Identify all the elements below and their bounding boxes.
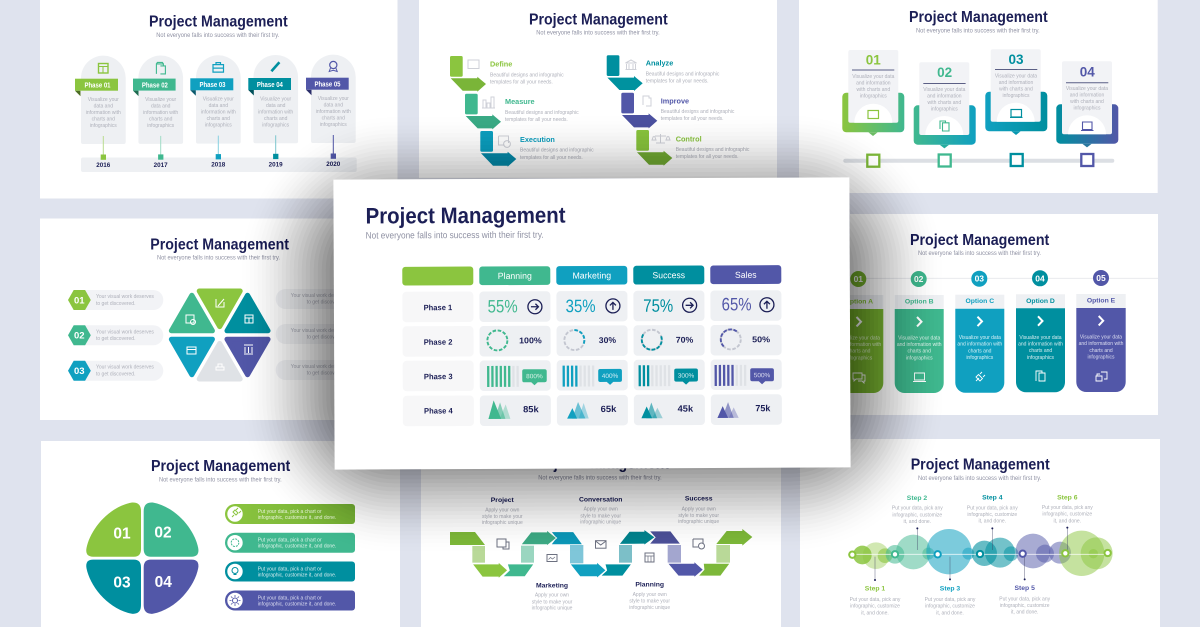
phase 03: charts and [207, 116, 230, 122]
step 2: infographic, customize [892, 512, 942, 518]
option C: infographics [966, 355, 994, 361]
phase 04: charts and [264, 116, 288, 122]
title: Project Management [911, 456, 1050, 473]
row 2: progress rings: 50% [752, 334, 771, 344]
item 01 [68, 290, 163, 310]
step 6: it, and done. [1054, 518, 1081, 524]
row 4: mountains and values [480, 394, 782, 426]
step: improve: Beautiful designs and infographic [661, 109, 735, 115]
card 03: and information [999, 80, 1033, 86]
card 02: infographics [931, 106, 958, 112]
option A: charts and [847, 349, 871, 355]
phase 01 [75, 56, 126, 169]
phase 05: charts and [322, 116, 345, 122]
step 1 [850, 586, 901, 616]
step: analyze [607, 55, 720, 91]
phase 02: data and [151, 103, 171, 109]
phase 03: data and [209, 103, 228, 109]
option A [834, 271, 883, 393]
right pills: to get discovered. [307, 370, 346, 376]
card 04: and information [1070, 92, 1104, 98]
option A: and information with [836, 342, 881, 348]
step: measure: templates for all your needs. [505, 117, 568, 123]
step: execution [480, 131, 594, 167]
step 1: it, and done. [861, 610, 889, 616]
phase 05: Visualize your [318, 96, 349, 102]
phase 04: Visualize your [260, 96, 292, 102]
phase 03: 2018 [211, 162, 226, 169]
row 2: progress rings [480, 325, 782, 356]
row labels: Phase 1 [424, 303, 453, 312]
option C: Visualize your data [959, 335, 1001, 341]
step 4: Step 4 [982, 495, 1003, 502]
label: marketing: Apply your own [535, 593, 569, 599]
center card shadow [237, 111, 947, 556]
title: Project Management [150, 236, 289, 253]
label: conversation: Apply your own [584, 507, 618, 513]
connector line [850, 277, 1158, 279]
phase 02: Visualize your [145, 97, 177, 103]
card 03: 03 [1008, 52, 1024, 67]
row 4: mountains and values: 75k [755, 403, 771, 413]
slide: phases timeline [40, 0, 398, 198]
option B: and information with [897, 342, 942, 348]
option D: infographics [1027, 355, 1054, 361]
slide: quadrant circle [41, 441, 400, 627]
header row: Marketing [572, 270, 611, 281]
option D: and information with [1018, 342, 1063, 348]
card 02: Visualize your data [923, 87, 966, 93]
row 3: bars and callouts: 300% [678, 373, 695, 380]
slide: options columns [834, 214, 1158, 415]
step 6: Put your data, pick any [1042, 505, 1093, 511]
step: execution: templates for all your needs. [520, 155, 583, 161]
slide: numbered cards [799, 0, 1158, 193]
subtitle: Not everyone falls into success with their first try. [918, 475, 1041, 482]
step: improve: Improve [661, 96, 689, 105]
main subtitle: Not everyone falls into success with their first try. [366, 230, 544, 240]
subtitle: Not everyone falls into success with their first try. [156, 32, 279, 39]
right pills: to get discovered. [307, 300, 346, 306]
step: define: Beautiful designs and infographic [490, 72, 564, 78]
quadrant 01 [86, 502, 141, 557]
label: conversation: infographic unique [580, 519, 621, 525]
item 03: Your visual work deserves [96, 364, 154, 370]
subtitle: Not everyone falls into success with their first try. [538, 475, 662, 482]
option A: infographics [845, 355, 873, 361]
bubble chart [849, 527, 1113, 581]
subtitle: Not everyone falls into success with their first try. [918, 250, 1041, 257]
phase 04: infographics [262, 122, 290, 128]
phase 04: information with [258, 109, 293, 115]
option C: 03 [975, 274, 984, 284]
phase 05: Phase 05 [314, 82, 341, 88]
step: analyze: templates for all your needs. [646, 79, 709, 85]
card 01: infographics [860, 94, 887, 100]
phase 05: information with [316, 109, 351, 115]
card 03: Visualize your data [995, 74, 1037, 80]
step: define: Define [490, 59, 512, 68]
row 4: mountains and values: 45k [678, 404, 694, 414]
item 03: 03 [74, 366, 85, 377]
card 03: with charts and [999, 86, 1033, 92]
step: control: Control [676, 134, 702, 143]
phase 01: data and [94, 104, 113, 110]
card 03 [985, 49, 1047, 166]
subtitle: Not everyone falls into success with their first try. [157, 254, 280, 261]
step 6: infographic, customize [1042, 512, 1092, 518]
phase 01: charts and [92, 116, 115, 122]
item 02 [68, 325, 163, 345]
step 2: Step 2 [907, 495, 927, 502]
step 5: Put your data, pick any [999, 596, 1051, 602]
card 04: Visualize your data [1066, 86, 1108, 92]
step 4: it, and done. [979, 519, 1006, 525]
quadrant 04 [144, 560, 198, 614]
row 2: progress rings: 100% [519, 335, 542, 345]
step 6: Step 6 [1057, 494, 1078, 501]
title: Project Management [529, 11, 668, 28]
subtitle: Not everyone falls into success with their first try. [159, 477, 282, 484]
phase 02: Phase 02 [142, 82, 168, 89]
phase 01: information with [86, 110, 121, 116]
quadrant 02 [144, 502, 198, 557]
right pills: Your visual work deserves [291, 293, 349, 299]
card 03: infographics [1003, 93, 1030, 99]
step 3: infographic, customize [925, 604, 975, 610]
title: Project Management [909, 9, 1048, 26]
bar 2: infographic, customize it, and done. [258, 544, 336, 550]
row 3: bars and callouts [480, 359, 782, 391]
right pills: Your visual work deserves [291, 328, 349, 334]
item 02: 02 [74, 331, 85, 342]
phase 01: Visualize your [88, 97, 119, 103]
step: measure: Beautiful designs and infographic [505, 110, 579, 116]
row 1: percentages [479, 290, 781, 322]
label: marketing: style to make your [532, 599, 573, 605]
item 02: to get discovered. [96, 336, 135, 342]
row 3: bars and callouts: 800% [526, 373, 543, 380]
step 3: Step 3 [940, 586, 960, 593]
phase 04: 2019 [269, 161, 283, 168]
phase 05: infographics [320, 122, 347, 128]
step: control: Beautiful designs and infographic [676, 147, 750, 153]
card 01: with charts and [856, 87, 890, 93]
bar 2: Put your data, pick a chart or [258, 538, 322, 544]
phase 05 [306, 55, 356, 168]
phase 04: data and [266, 103, 286, 109]
label: planning: Apply your own [633, 592, 667, 598]
row 1: percentages: 55% [488, 296, 518, 316]
option D: Option D [1026, 298, 1055, 305]
step: analyze: Beautiful designs and infographic [646, 72, 720, 78]
option C [955, 271, 1004, 393]
row 1: percentages: 35% [566, 296, 596, 316]
step 5 [999, 585, 1051, 616]
option E: Visualize your data [1080, 334, 1122, 340]
item 03: to get discovered. [96, 371, 135, 377]
triangle hexagon [171, 291, 268, 379]
step 1: Put your data, pick any [850, 597, 901, 603]
label: success: Success [685, 496, 713, 503]
phase 03: infographics [205, 123, 232, 129]
card 04 [1056, 61, 1118, 166]
label: success: infographic unique [678, 519, 719, 525]
option B [895, 271, 944, 393]
step: measure: Measure [505, 97, 535, 106]
quadrant 01: 01 [113, 525, 131, 542]
label: planning: infographic unique [629, 605, 670, 611]
bar 4: infographic, customize it, and done. [258, 602, 336, 608]
phase 03: information with [201, 110, 236, 116]
card 01: 01 [866, 52, 881, 67]
step 3: Put your data, pick any [925, 597, 976, 603]
phase 03: Visualize your [203, 97, 234, 103]
step 5: Step 5 [1014, 585, 1035, 592]
row 1: percentages: 65% [722, 294, 752, 314]
step: control [636, 130, 750, 166]
title: Project Management [151, 458, 290, 475]
bar 1: Put your data, pick a chart or [258, 509, 322, 515]
option B: charts and [908, 349, 931, 355]
card 02 [914, 62, 976, 166]
option C: Option C [965, 298, 994, 305]
option C: charts and [968, 348, 992, 354]
row 2: progress rings: 30% [599, 335, 617, 345]
step: analyze: Analyze [646, 59, 673, 68]
label: conversation: Conversation [579, 496, 622, 503]
row 4: mountains and values: 85k [523, 404, 540, 414]
label: project: style to make your [482, 514, 523, 520]
option A: Option A [845, 298, 873, 306]
option A: Visualize your data [838, 335, 880, 341]
right pills: Your visual work deserves [291, 364, 349, 370]
label: project [482, 497, 523, 549]
option A: 01 [854, 274, 863, 284]
row 3: bars and callouts: 500% [754, 372, 771, 379]
title: Project Management [910, 232, 1049, 249]
header row: Planning [498, 271, 532, 281]
option B: 02 [914, 274, 924, 284]
step: measure [465, 94, 579, 129]
step 2 [892, 495, 943, 525]
slide: define measure execution steps [419, 0, 777, 178]
phase 01: 2016 [96, 162, 111, 169]
item 03 [68, 361, 163, 381]
item 01: to get discovered. [96, 301, 135, 307]
quadrant 02: 02 [154, 524, 172, 541]
row 2: progress rings: 70% [676, 335, 694, 345]
phase 02: charts and [149, 116, 173, 122]
option B: Option B [905, 298, 934, 305]
title: Project Management [149, 14, 288, 31]
option E [1076, 270, 1126, 392]
panel: center project management table [333, 177, 851, 470]
main title: Project Management [365, 203, 566, 228]
bar 1 [225, 504, 355, 524]
item 01: Your visual work deserves [96, 294, 154, 300]
item 01: 01 [74, 295, 85, 306]
step: control: templates for all your needs. [676, 154, 739, 160]
label: marketing: Marketing [536, 582, 568, 589]
option D: Visualize your data [1019, 335, 1062, 341]
label: conversation: style to make your [580, 513, 621, 519]
slide: hexagon triangles [40, 218, 356, 420]
row labels: Phase 4 [424, 406, 453, 416]
phase 02: information with [143, 110, 178, 116]
phase 05: data and [324, 102, 343, 108]
bar 3 [225, 562, 355, 582]
bar 3: infographic, customize it, and done. [258, 572, 336, 578]
option D: charts and [1029, 348, 1052, 354]
title: Project Management [530, 456, 669, 472]
step: execution: Beautiful designs and infographic [520, 148, 594, 154]
card 02: and information [927, 94, 962, 100]
label: planning: style to make your [629, 599, 670, 605]
bar 1: infographic, customize it, and done. [258, 515, 336, 521]
card 04: with charts and [1070, 99, 1104, 105]
label: success: Apply your own [682, 506, 716, 512]
step: improve [621, 93, 735, 128]
option D: 04 [1035, 273, 1045, 283]
label: marketing [532, 554, 573, 611]
step 2: it, and done. [904, 519, 931, 525]
quadrant 03: 03 [113, 574, 131, 591]
header row: Sales [735, 270, 757, 280]
step 5: infographic, customize [1000, 603, 1050, 609]
label: project: infographic unique [482, 520, 523, 526]
phase 01: Phase 01 [84, 82, 111, 90]
step 5: it, and done. [1011, 610, 1038, 616]
bar 4: Put your data, pick a chart or [258, 596, 322, 602]
option B: Visualize your data [898, 335, 940, 341]
step 4: Put your data, pick any [967, 506, 1018, 512]
option B: infographics [906, 355, 933, 361]
step: define [450, 56, 564, 92]
step: improve: templates for all your needs. [661, 116, 724, 122]
right pills [276, 289, 356, 380]
option E: 05 [1096, 273, 1106, 283]
row 3: bars and callouts: 400% [602, 373, 619, 380]
header row [402, 265, 781, 286]
header row: Success [653, 270, 686, 280]
card 01: Visualize your data [852, 74, 895, 80]
row 1: percentages: 75% [643, 296, 673, 316]
bar 4 [225, 590, 355, 610]
row labels [402, 292, 474, 426]
row labels: Phase 2 [424, 338, 453, 347]
bar 2 [225, 533, 355, 553]
card 01 [842, 50, 904, 167]
phase 04 [248, 55, 298, 168]
timeline track [843, 159, 1114, 163]
option D [1016, 270, 1065, 392]
phase 04: Phase 04 [257, 82, 283, 89]
slide: bubble steps [800, 439, 1160, 627]
label: success [678, 496, 719, 549]
phase 01: infographics [90, 123, 117, 129]
step 2: Put your data, pick any [892, 506, 943, 512]
label: success: style to make your [678, 513, 719, 519]
label: planning: Planning [635, 582, 664, 589]
step 1: Step 1 [865, 586, 885, 593]
label: conversation [579, 496, 622, 548]
phase 05: 2020 [326, 161, 341, 168]
slide: zigzag arrows [421, 440, 781, 627]
option E: Option E [1087, 298, 1116, 304]
quadrant 03 [86, 560, 141, 614]
step 4 [967, 495, 1018, 525]
right pills: to get discovered. [307, 334, 346, 340]
phase 03 [190, 55, 241, 169]
subtitle: Not everyone falls into success with their first try. [536, 30, 660, 37]
quadrant 04: 04 [155, 574, 172, 591]
option E: infographics [1088, 354, 1115, 360]
label: project: Project [491, 497, 515, 504]
row 1: arrow icons [528, 298, 774, 314]
step: execution: Execution [520, 135, 555, 144]
card 04: 04 [1080, 64, 1095, 80]
option C: and information with [957, 342, 1002, 348]
row 4: mountains and values: 65k [601, 404, 617, 414]
zigzag arrow chain [450, 529, 752, 579]
label: project: Apply your own [485, 507, 520, 513]
label: marketing: infographic unique [532, 605, 573, 611]
year band [81, 158, 357, 172]
option E: charts and [1089, 348, 1113, 354]
step: define: templates for all your needs. [490, 79, 553, 85]
step 6 [1042, 494, 1093, 524]
phase 02 [133, 56, 183, 169]
bar 3: Put your data, pick a chart or [258, 566, 322, 572]
step 1: infographic, customize [850, 604, 900, 610]
card 01: and information [856, 80, 891, 86]
phase 02: infographics [147, 123, 175, 129]
step 3: it, and done. [936, 610, 964, 616]
phase 03: Phase 03 [200, 82, 226, 89]
subtitle: Not everyone falls into success with their first try. [916, 28, 1040, 35]
row labels: Phase 3 [424, 372, 453, 381]
label: planning [629, 553, 670, 611]
card 04: infographics [1074, 106, 1101, 112]
option E: and information with [1079, 341, 1124, 347]
step 4: infographic, customize [967, 512, 1017, 518]
card 02: 02 [937, 65, 952, 80]
phase 02: 2017 [154, 162, 168, 169]
step 3 [925, 586, 976, 616]
card 02: with charts and [927, 100, 961, 106]
item 02: Your visual work deserves [96, 329, 154, 335]
triangle icons [186, 299, 253, 370]
